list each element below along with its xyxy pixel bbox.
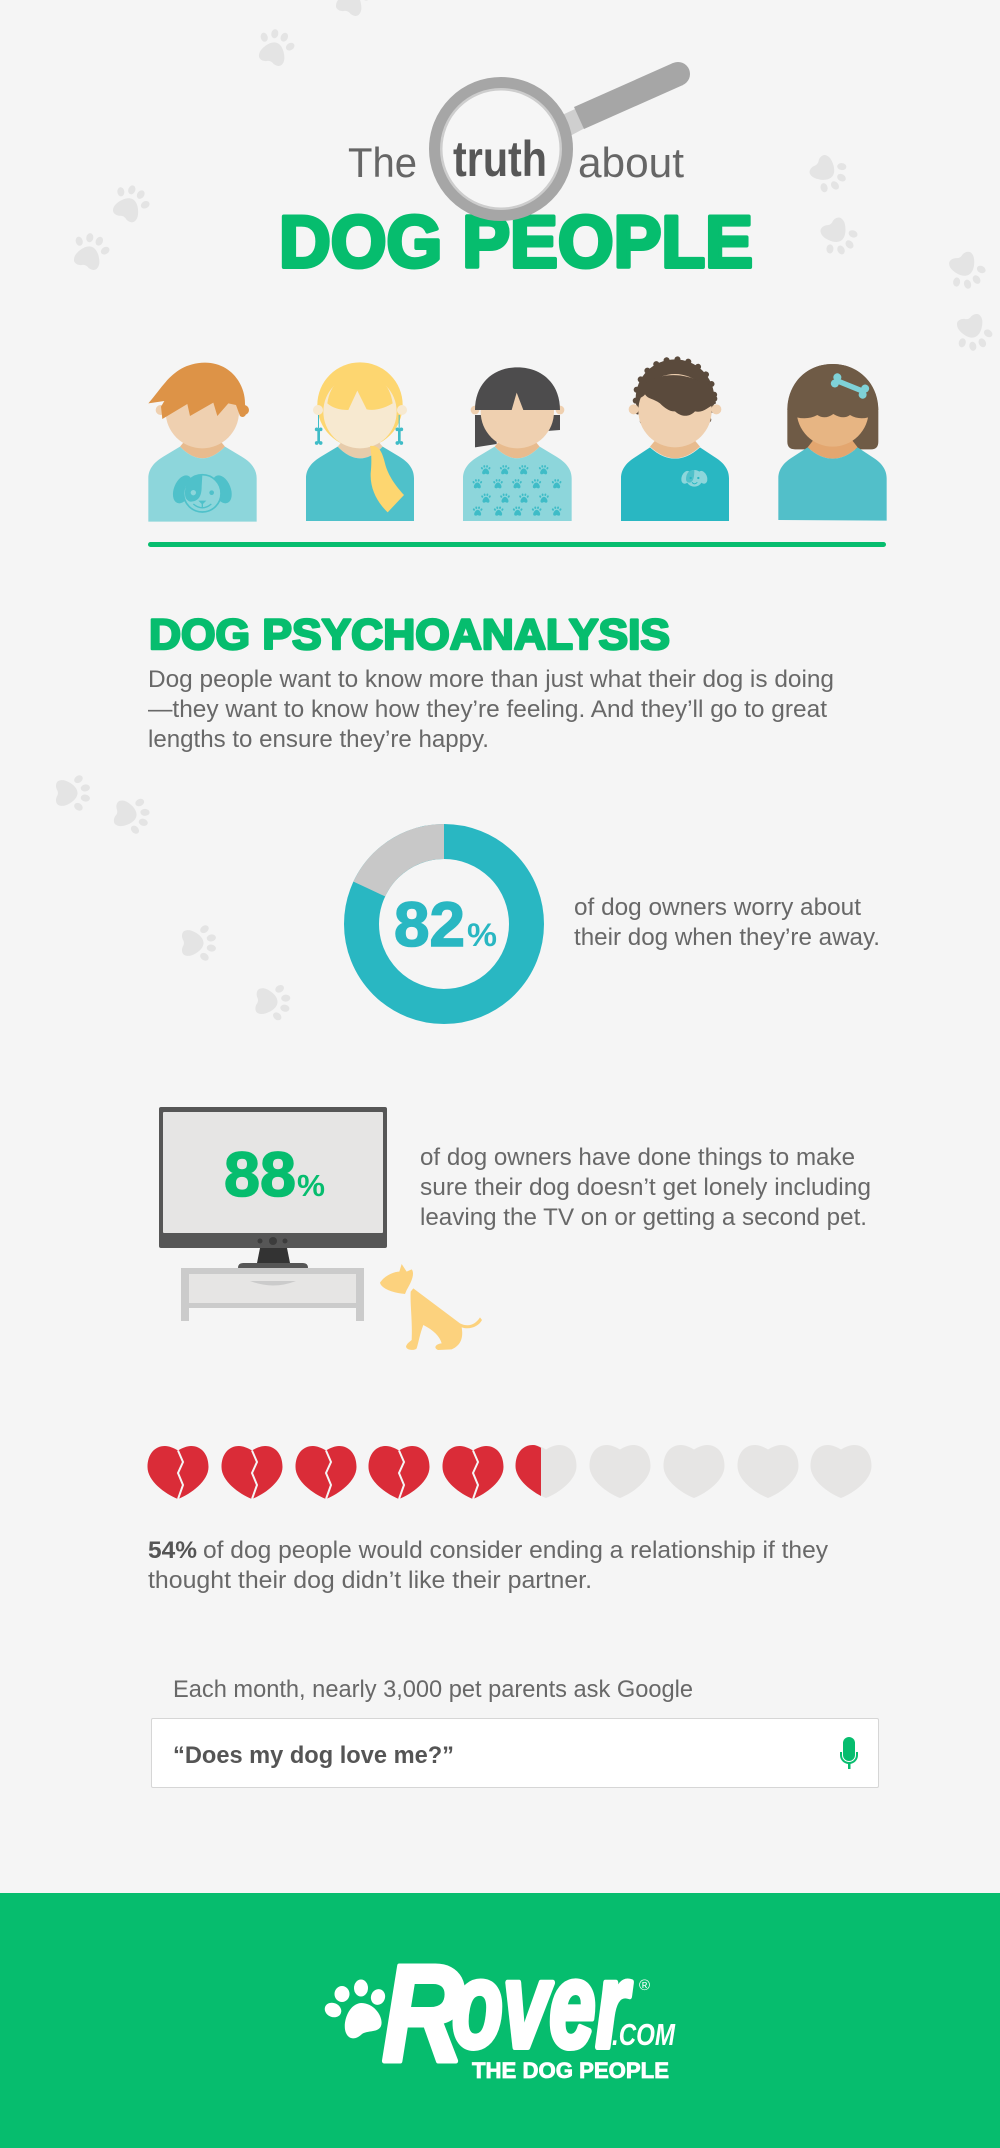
- stat: percent sign: %: [297, 1168, 325, 1203]
- search query: “Does my dog love me?”: [173, 1742, 454, 1769]
- search box: [152, 1718, 878, 1788]
- hearts caption: of dog people would consider ending a relationship if they: [203, 1537, 828, 1564]
- icon: magnifying glass: [434, 62, 690, 216]
- person 4: curly hair, small dog logo: [621, 359, 729, 521]
- background paw prints: [56, 0, 997, 1023]
- tv caption: sure their dog doesn’t get lonely including: [420, 1174, 871, 1201]
- stat: percent sign: %: [467, 917, 497, 953]
- person 5: brown hair, bone clip: [778, 364, 887, 521]
- characters row: [148, 359, 887, 522]
- title: dog people: DOG PEOPLE: [279, 202, 753, 283]
- tv caption: leaving the TV on or getting a second pet.: [420, 1204, 867, 1231]
- logo: registered mark: ®: [639, 1977, 650, 1994]
- section heading: DOG PSYCHOANALYSIS: [149, 611, 670, 659]
- green divider line: [148, 542, 886, 547]
- donut caption: of dog owners worry about: [574, 894, 861, 921]
- logo wordmark: R: R: [382, 1937, 464, 2091]
- donut caption: [574, 894, 880, 951]
- broken hearts: [148, 1446, 504, 1499]
- intro text: [148, 666, 834, 753]
- logo tagline: THE DOG PEOPLE: [472, 2058, 669, 2083]
- logo wordmark: over: over: [452, 1937, 632, 2073]
- donut chart: 82%: [362, 842, 526, 1006]
- icon: microphone: [841, 1737, 857, 1769]
- footer band: [0, 1893, 1000, 2148]
- search intro text: Each month, nearly 3,000 pet parents ask Google: [173, 1676, 693, 1703]
- icon: logo paw: [322, 1980, 387, 2038]
- title: [279, 62, 753, 283]
- tv caption: [420, 1144, 871, 1231]
- empty hearts: [590, 1445, 872, 1498]
- logo: .com: .COM: [612, 2017, 676, 2052]
- hearts caption: 54%: [148, 1537, 197, 1564]
- tv set: [159, 1107, 387, 1268]
- stat: 82: 82: [394, 890, 465, 960]
- tv caption: of dog owners have done things to make: [420, 1144, 855, 1171]
- title: about: about: [578, 139, 684, 186]
- intro text: lengths to ensure they’re happy.: [148, 726, 489, 753]
- rover logo: [322, 1937, 676, 2091]
- illustration: tv on a stand: [159, 1107, 387, 1321]
- icon: sitting dog: [380, 1264, 482, 1350]
- person 3: dark hair, paw sweater: [463, 367, 572, 521]
- donut caption: their dog when they’re away.: [574, 924, 880, 951]
- stat: 88: 88: [224, 1140, 296, 1210]
- title: the: The: [348, 139, 417, 186]
- half filled heart: [516, 1445, 576, 1498]
- tv stand: [181, 1268, 364, 1321]
- hearts caption: [148, 1537, 828, 1594]
- title: truth: truth: [453, 131, 547, 187]
- person 1: orange hair, dog shirt: [148, 363, 257, 522]
- hearts caption: thought their dog didn’t like their partner.: [148, 1567, 592, 1594]
- person 2: blonde hair, bone earrings: [306, 362, 414, 521]
- hearts: 54 percent: [148, 1445, 872, 1499]
- intro text: —they want to know how they’re feeling. And they’ll go to great: [148, 696, 827, 723]
- intro text: Dog people want to know more than just what their dog is doing: [148, 666, 834, 693]
